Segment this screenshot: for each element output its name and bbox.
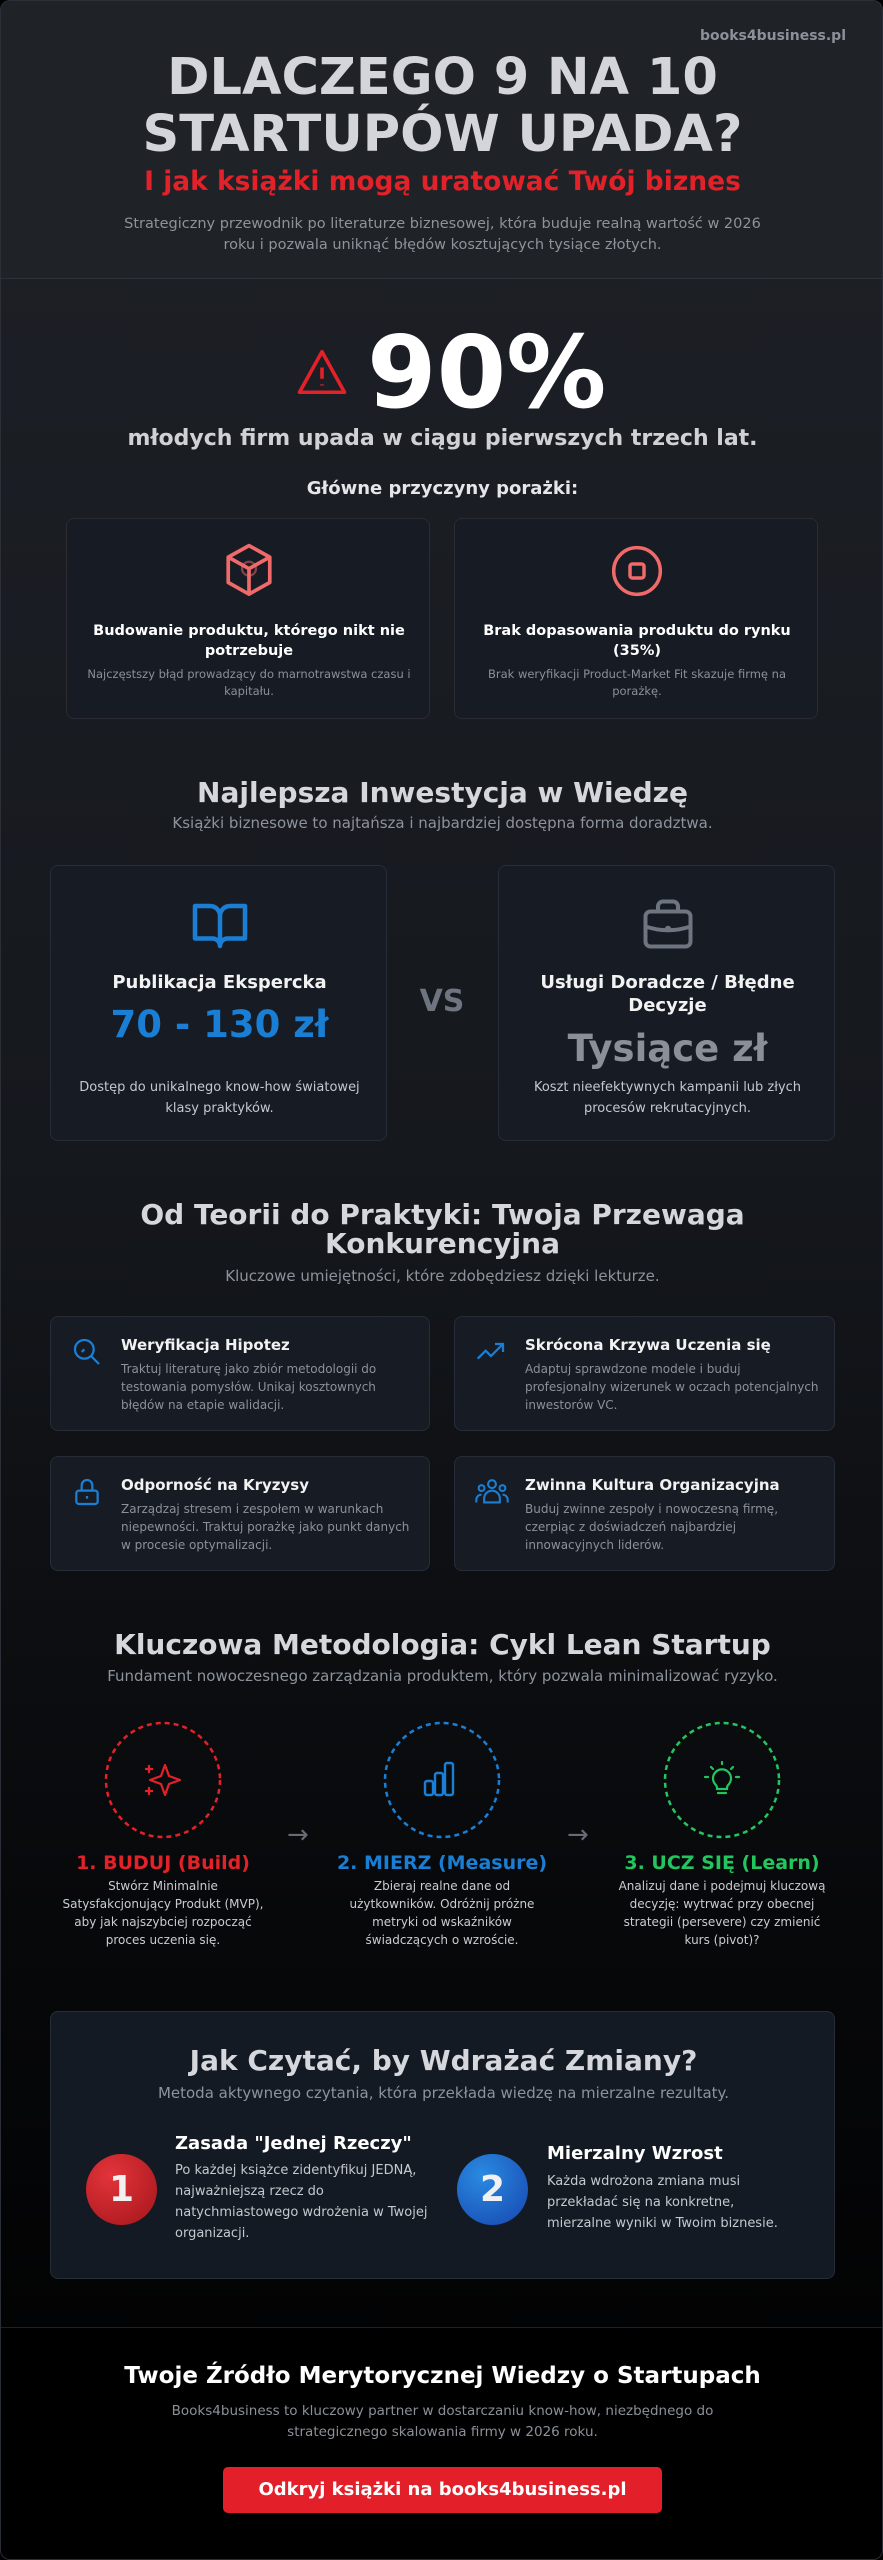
title: DLACZEGO 9 NA 10 (167, 48, 718, 107)
icon: trend (476, 1342, 504, 1360)
icon: lock (75, 1478, 99, 1506)
panel: cause 2 (454, 518, 818, 719)
skill card 2: Adaptuj sprawdzone modele i buduj profesjonalny wizerunek w oczach potencjalnych inwestorów VC. (525, 1362, 819, 1412)
step: measure: Zbieraj realne dane od użytkowników. Odróżnij próżne metryki od wskaźników świadczących o wzroście. (350, 1879, 534, 1947)
skill card 3: Zarządzaj stresem i zespołem w warunkach niepewności. Traktuj porażkę jako punkt danych w procesie optymalizacji. (121, 1502, 409, 1552)
heading: how to read: Jak Czytać, by Wdrażać Zmiany? (190, 2044, 697, 2077)
icon: stop (612, 546, 662, 596)
subheading: skills: Kluczowe umiejętności, które zdobędziesz dzięki lekturze. (225, 1267, 660, 1285)
subheading: lean: Fundament nowoczesnego zarządzania produktem, który pozwala minimalizować ryzyko. (107, 1667, 778, 1685)
badge 1: 1 (109, 2169, 134, 2210)
cause 1 title: Budowanie produktu, którego nikt nie potrzebuje (93, 623, 405, 659)
icon: search (74, 1338, 100, 1365)
cause 2 desc: Brak weryfikacji Product-Market Fit skazuje firmę na porażkę. (488, 667, 786, 698)
books price: 70 - 130 zł (110, 1003, 328, 1046)
skill card 4: Buduj zwinne zespoły i nowoczesną firmę, czerpiąc z doświadczeń najbardziej innowacyjnych liderów. (525, 1502, 778, 1552)
big number: 90% (367, 314, 606, 431)
tip 1: Zasada "Jednej Rzeczy" (175, 2133, 412, 2154)
icon: briefcase (644, 900, 692, 948)
step: build: 1. BUDUJ (Build) (76, 1852, 250, 1874)
badge 2: 2 (480, 2169, 505, 2210)
title: STARTUPÓW UPADA? (143, 105, 742, 164)
skill card 4 (454, 1456, 835, 1571)
books title: Publikacja Ekspercka (112, 972, 327, 993)
panel: books (50, 865, 387, 1141)
skill card 1: Traktuj literaturę jako zbiór metodologii do testowania pomysłów. Unikaj kosztownych błędów na etapie walidacji. (121, 1362, 376, 1412)
subtitle: I jak książki mogą uratować Twój biznes (144, 166, 741, 197)
icon: bar chart circle (384, 1722, 500, 1838)
icon: book (192, 904, 248, 948)
panel: cause 1 (66, 518, 430, 719)
brand: books4business.pl (700, 28, 846, 44)
arrow 1: → (287, 1820, 309, 1850)
intro text: Strategiczny przewodnik po literaturze biznesowej, która buduje realną wartość w 2026 roku i pozwala uniknąć błędów kosztujących tysiące złotych. (124, 216, 761, 253)
cta button: Odkryj książki na books4business.pl (258, 2479, 627, 2500)
step: build (63, 1722, 263, 1947)
tip 1: Po każdej książce zidentyfikuj JEDNĄ, najważniejszą rzecz do natychmiastowego wdrożenia w Twojej organizacji. (175, 2163, 427, 2241)
subheading: investment: Książki biznesowe to najtańsza i najbardziej dostępna forma doradztwa. (172, 814, 713, 832)
tip 2 (457, 2143, 778, 2231)
consulting price: Tysiące zł (568, 1027, 767, 1070)
icon: sparkle circle (104, 1722, 222, 1838)
tip 2: Mierzalny Wzrost (547, 2143, 723, 2164)
step: measure (337, 1722, 547, 1947)
skill card 2 (454, 1316, 835, 1431)
step: learn: 3. UCZ SIĘ (Learn) (624, 1852, 820, 1874)
step: build: Stwórz Minimalnie Satysfakcjonujący Produkt (MVP), aby jak najszybciej rozpocząć proces uczenia się. (63, 1879, 263, 1947)
icon: warning (298, 350, 346, 394)
heading: skills: Od Teorii do Praktyki: Twoja Przewaga Konkurencyjna (140, 1198, 745, 1260)
step: measure: 2. MIERZ (Measure) (337, 1852, 547, 1874)
panel: how to read (50, 2011, 835, 2279)
heading: lean: Kluczowa Metodologia: Cykl Lean Startup (114, 1628, 771, 1661)
skill card 3: Odporność na Kryzysy (121, 1476, 309, 1494)
stat: 90% (298, 314, 606, 431)
header (1, 1, 883, 279)
step: learn (618, 1722, 825, 1947)
books desc: Dostęp do unikalnego know-how światowej klasy praktyków. (79, 1080, 360, 1116)
icon: team (475, 1479, 509, 1504)
icon: bulb circle (664, 1722, 780, 1838)
skill card 4: Zwinna Kultura Organizacyjna (525, 1476, 780, 1494)
consulting desc: Koszt nieefektywnych kampanii lub złych procesów rekrutacyjnych. (534, 1080, 801, 1116)
title (143, 48, 742, 164)
panel: consulting (498, 865, 835, 1141)
skill card 3 (50, 1456, 430, 1571)
heading: investment: Najlepsza Inwestycja w Wiedzę (197, 776, 688, 809)
icon: cube (226, 544, 272, 596)
skill card 1: Weryfikacja Hipotez (121, 1336, 290, 1354)
footer (1, 2327, 883, 2560)
cta button (223, 2467, 662, 2513)
vs label: VS (420, 984, 464, 1019)
subheading: Metoda aktywnego czytania, która przekłada wiedzę na mierzalne rezultaty. (158, 2084, 729, 2102)
badge 1 (86, 2154, 157, 2225)
cause 2 title: Brak dopasowania produktu do rynku (35%) (483, 623, 791, 659)
footer text: Books4business to kluczowy partner w dostarczaniu know-how, niezbędnego do strategicznego skalowania firmy w 2026 roku. (172, 2403, 713, 2440)
skill card 2: Skrócona Krzywa Uczenia się (525, 1336, 771, 1354)
badge 2 (457, 2154, 528, 2225)
consulting title: Usługi Doradcze / Błędne Decyzje (540, 972, 795, 1016)
footer heading: Twoje Źródło Merytorycznej Wiedzy o Startupach (124, 2363, 761, 2389)
step: learn: Analizuj dane i podejmuj kluczową decyzję: wytrwać przy obecnej strategii (persevere) czy zmienić kurs (pivot)? (619, 1879, 825, 1947)
stat caption: młodych firm upada w ciągu pierwszych trzech lat. (127, 426, 758, 451)
causes heading: Główne przyczyny porażki: (307, 478, 578, 499)
tip 2: Każda wdrożona zmiana musi przekładać się na konkretne, mierzalne wyniki w Twoim biznesie. (547, 2174, 778, 2231)
skill card 1 (50, 1316, 430, 1431)
tip 1 (86, 2133, 427, 2241)
arrow 2: → (567, 1820, 589, 1850)
cause 1 desc: Najczęstszy błąd prowadzący do marnotrawstwa czasu i kapitału. (87, 667, 411, 698)
